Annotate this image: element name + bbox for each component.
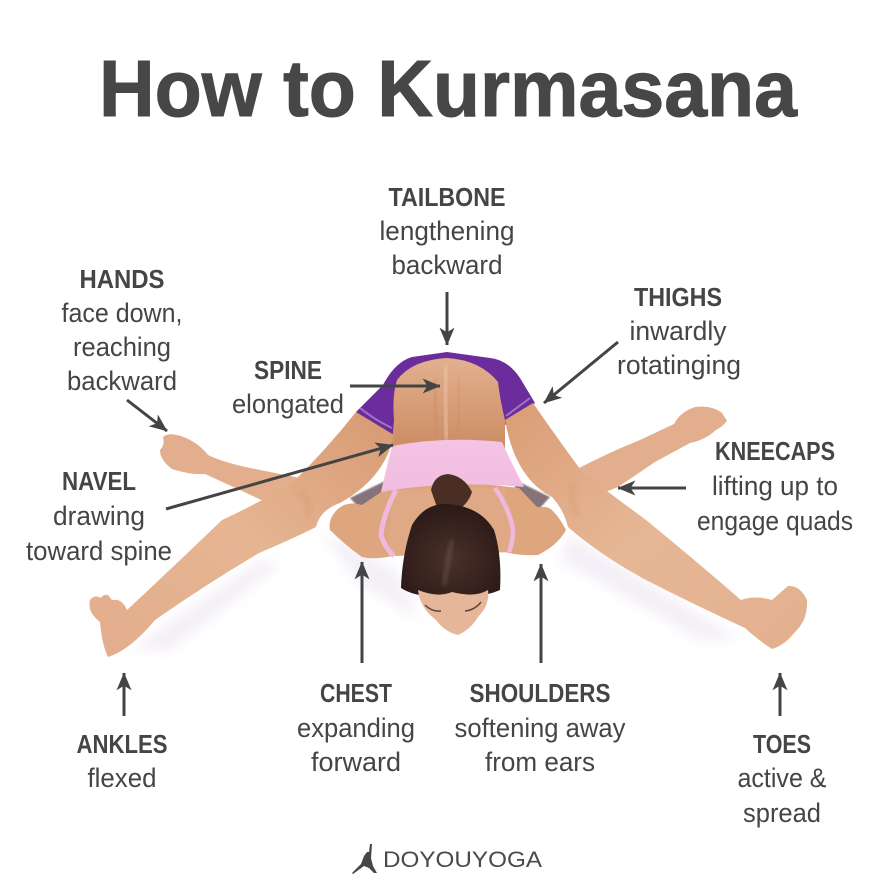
label: tailbone: backward [392,250,502,280]
label: kneecaps: engage quads [697,506,853,536]
label: navel: toward spine [26,536,172,566]
label: hands: face down, [62,298,182,328]
label: chest: expanding [297,713,415,743]
label: thighs: rotatinging [617,350,741,380]
arrow: tailbone [446,292,448,345]
back [391,358,505,455]
label: hands [62,264,182,396]
arrow: kneecaps [618,486,686,490]
label: chest: CHEST [320,678,392,708]
arm: left, behind leg [160,434,310,505]
label: shoulders: from ears [485,747,595,777]
face [418,590,488,635]
shorts: purple [356,352,535,440]
figure: woman in Kurmasana pose [89,352,807,657]
label: shoulders [454,678,626,777]
label: hands: reaching [73,332,171,362]
label: tailbone [380,182,514,280]
label: ankles: ANKLES [76,729,168,759]
icon: warrior pose silhouette [352,844,377,874]
label: toes [738,729,826,828]
arrow: ankles [122,673,126,716]
arrow: chest [360,562,364,663]
label: tailbone: TAILBONE [388,182,506,212]
upper back between straps [388,488,512,556]
label: thighs: inwardly [630,316,727,346]
wordmark: DOYOUYOGA [383,847,542,872]
label: navel: drawing [53,501,145,531]
label: chest [297,678,415,777]
label: thighs [617,282,741,380]
arrow: spine [350,384,440,388]
title: How to Kurmasana [99,44,797,133]
label: shoulders: softening away [454,713,626,743]
leg: right [505,403,807,649]
label: toes: spread [743,798,821,828]
label: navel [26,466,172,566]
arrow: navel [166,445,393,509]
label: navel: NAVEL [62,466,136,496]
label: toes: TOES [753,729,811,759]
arrow: shoulders [540,564,542,663]
label: spine: elongated [232,389,344,419]
label: spine [232,355,344,419]
label: kneecaps: lifting up to [712,471,838,501]
label: ankles [76,729,168,793]
label: thighs: THIGHS [634,282,722,312]
leg: left [89,412,394,657]
arrow: hands [127,400,167,431]
top: pink [381,440,524,556]
floor shadows [130,530,740,650]
arrow: thighs [544,342,618,403]
shoulders and arms [330,480,566,558]
label: kneecaps: KNEECAPS [715,436,835,466]
shadow under torso [350,480,550,512]
arrow: toes [778,673,782,716]
label: hands: backward [67,366,177,396]
label: chest: forward [311,747,401,777]
label: toes: active & [738,763,826,793]
logo: DoYouYoga [352,844,542,874]
label: tailbone: lengthening [380,216,514,246]
arm: right, behind leg [575,407,727,500]
label: hands: HANDS [80,264,164,294]
head hair [401,504,500,596]
label: kneecaps [697,436,853,536]
hair bun [431,474,472,512]
label: shoulders: SHOULDERS [470,678,610,708]
label: spine: SPINE [254,355,322,385]
label: ankles: flexed [88,763,156,793]
